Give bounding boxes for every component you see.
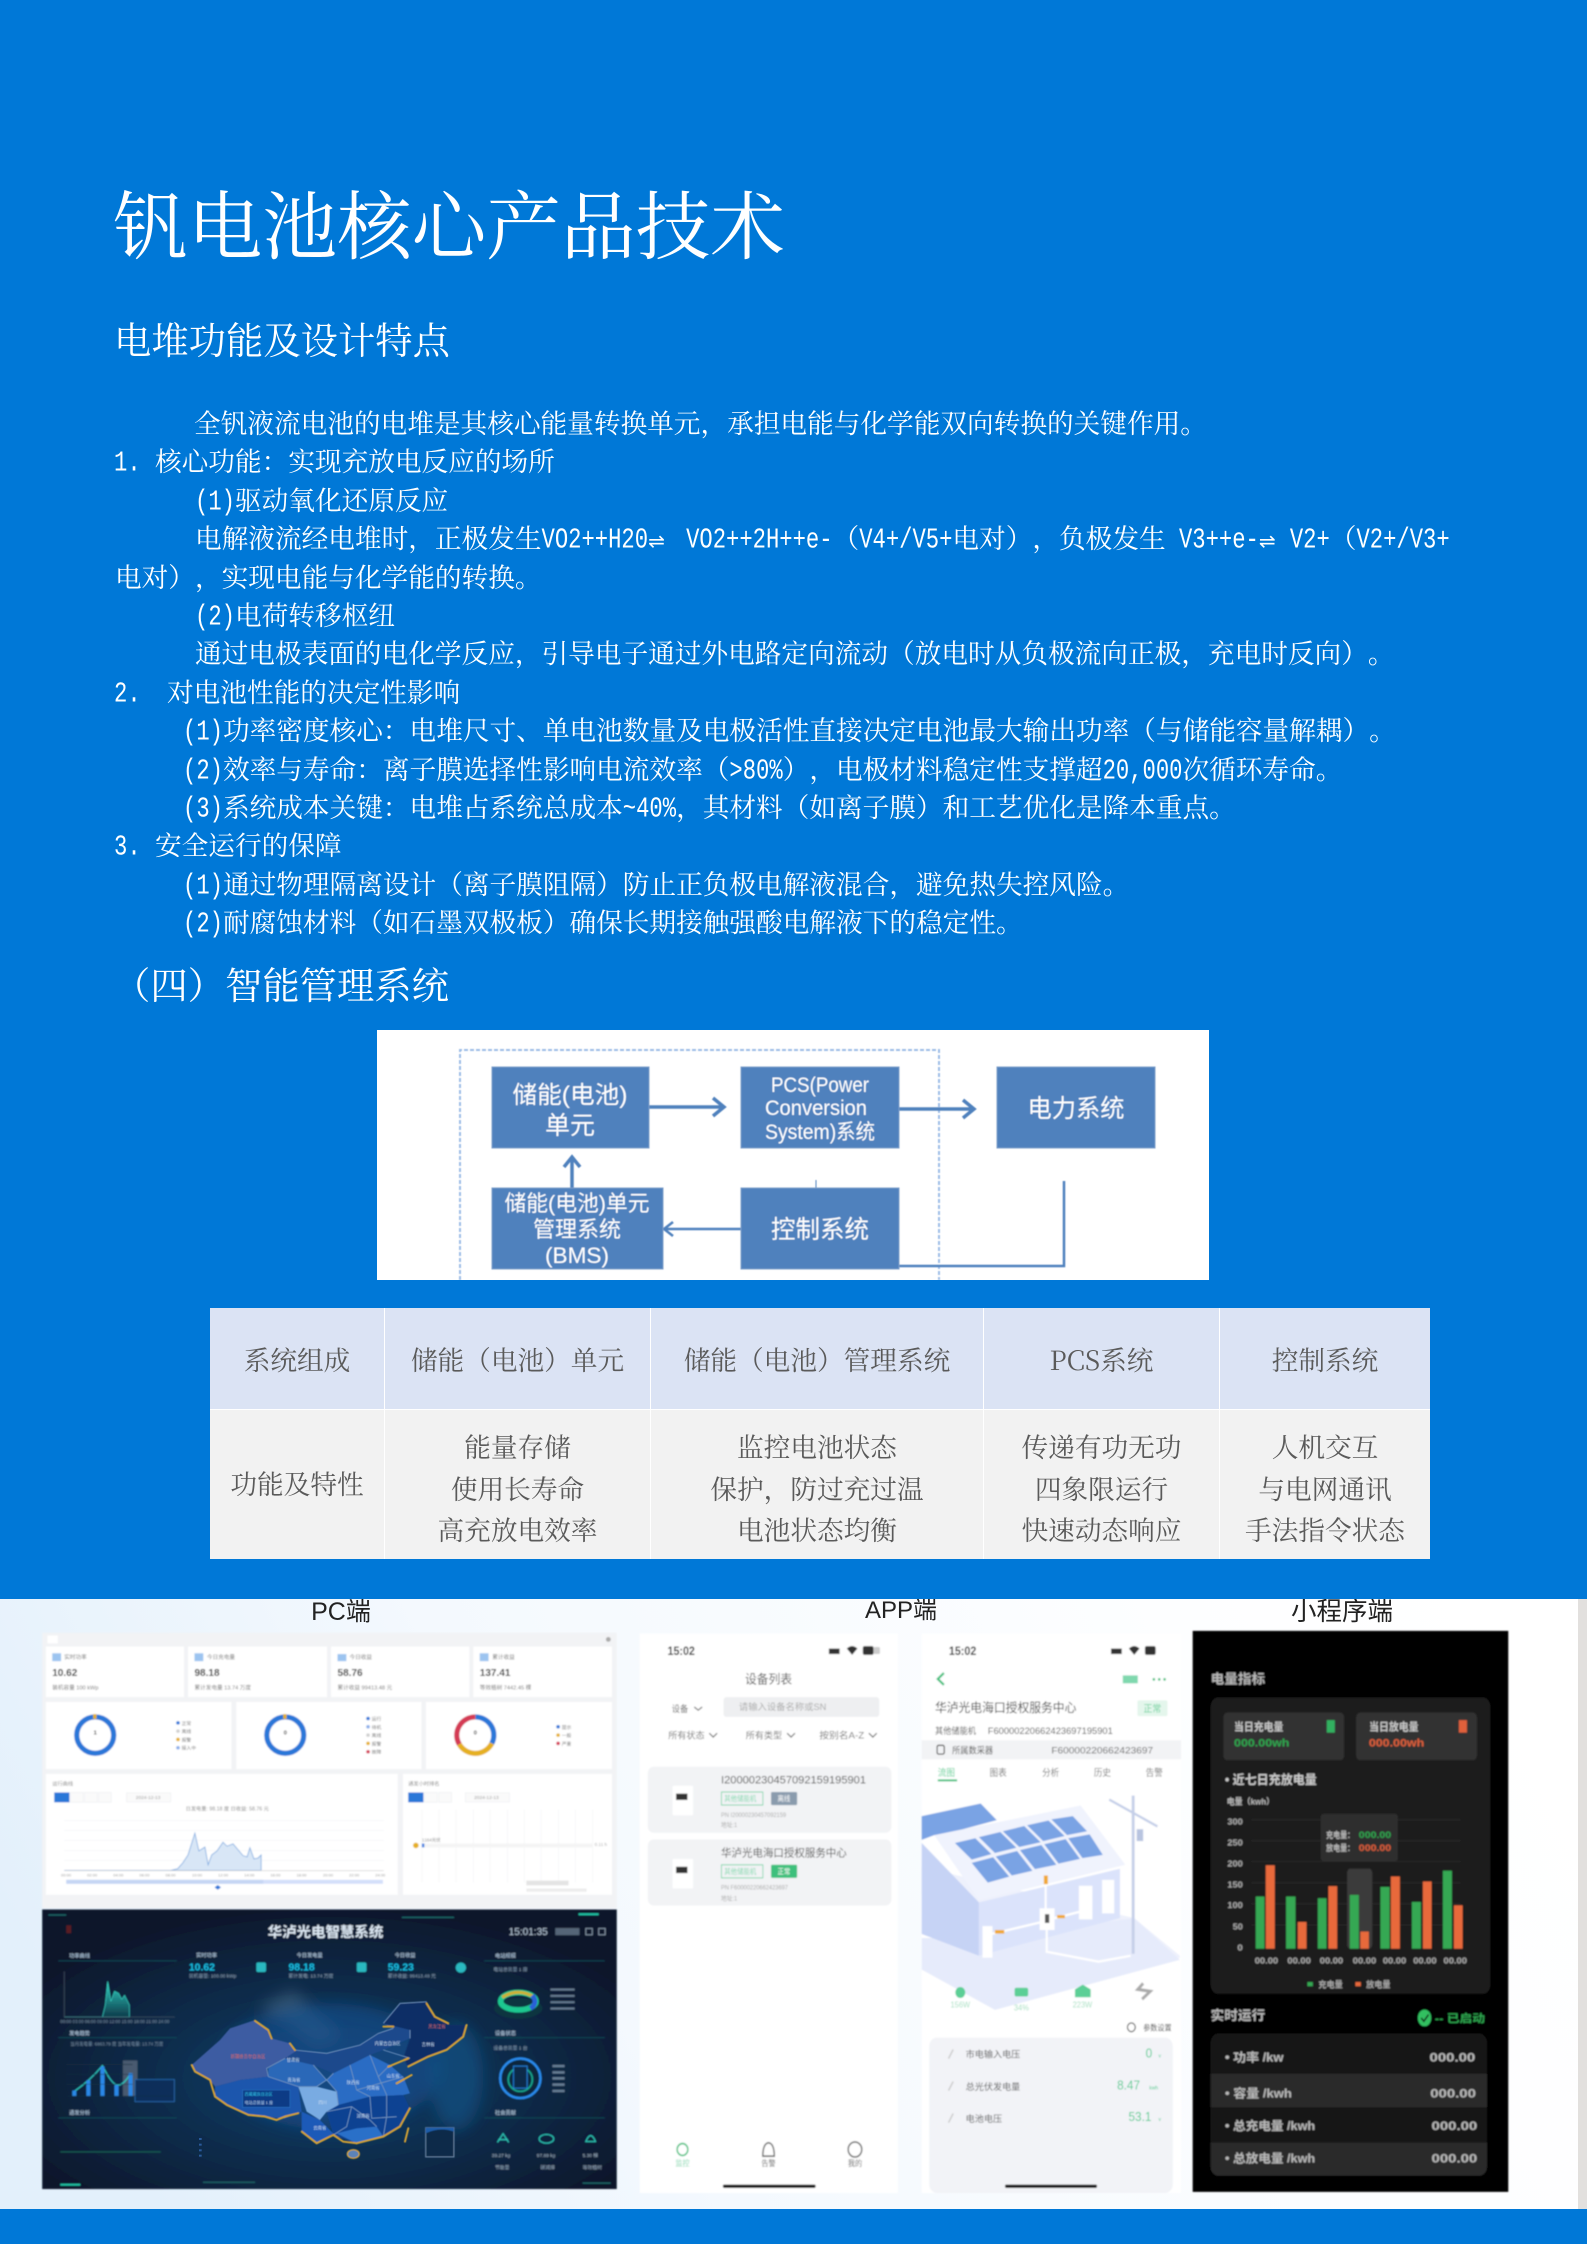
screenshot: big-screen map dashboard: 59.23 — [388, 1962, 414, 1973]
text block: stack function description: 2. — [114, 678, 141, 710]
screenshot: PC dashboard: 等效植树 7442.45 棵 — [480, 1684, 532, 1692]
screenshot: APP device list: 我的 — [848, 2158, 862, 2168]
screenshot: mini program: 实时运行 — [1211, 2007, 1265, 2023]
text block: stack function description: 20,000 — [1103, 755, 1182, 787]
screenshot: APP device detail: 正常 — [1144, 1702, 1161, 1714]
table: system composition: 监控电池状态 — [737, 1426, 897, 1465]
map of China: 青海省 — [287, 2076, 301, 2083]
screenshot: APP device detail: F60000220662423697195901 — [988, 1726, 1113, 1736]
diagram: storage system block flow: 电力系统 — [1028, 1095, 1124, 1123]
screenshot: APP device detail: 流图 — [938, 1767, 955, 1778]
screenshot: big-screen map dashboard: 功率曲线 — [69, 1952, 91, 1960]
screenshot: PC dashboard: 接入中 — [182, 1745, 196, 1752]
screenshot: mini program: • 功率 /kw — [1225, 2049, 1284, 2065]
text block: stack function description: (2) — [183, 909, 223, 941]
screenshot: APP device list: 告警 — [761, 2158, 776, 2168]
screenshot: APP device detail: 告警 — [1146, 1767, 1163, 1778]
screenshot: mini program: 100 — [1227, 1901, 1243, 1910]
screenshot: mini program: 00.00 — [1353, 1956, 1376, 1966]
text block: stack function description: (2) — [183, 755, 223, 787]
screenshot: APP device list: 请输入设备名称或SN — [739, 1701, 826, 1712]
screenshot: big-screen map dashboard: 碳减排 — [540, 2164, 555, 2171]
screenshot: mini program: • 容量 /kwh — [1225, 2085, 1292, 2101]
table: system composition — [210, 1308, 1430, 1559]
map of China: 湖南省 — [357, 2112, 370, 2119]
heading: stack features: 电堆功能及设计特点 — [114, 311, 450, 365]
screenshot: PC dashboard: 运行曲线 — [52, 1780, 73, 1788]
screenshot: mini program: 电量（kwh） — [1227, 1796, 1274, 1807]
screenshot: APP device list: 华泸光电海口授权服务中心 — [721, 1846, 847, 1860]
screenshot: PC dashboard: 严重 — [562, 1740, 572, 1747]
screenshot: mini program: • 近七日充放电量 — [1225, 1772, 1317, 1787]
screenshot: APP device detail: 0 — [1146, 2046, 1152, 2061]
text block: stack function description: 驱动氧化还原反应 — [235, 479, 448, 518]
screenshot: PC dashboard: 18:00 — [297, 1872, 307, 1877]
screenshot: mini program: 000.00wh — [1369, 1738, 1424, 1750]
diagram: storage system block flow — [377, 1030, 1209, 1280]
text block: stack function description — [114, 402, 1450, 941]
screenshot: APP device detail: 15:02 — [949, 1645, 976, 1658]
screenshot: APP device detail: 8.47 — [1117, 2078, 1140, 2093]
screenshot: PC dashboard: 离线 — [372, 1732, 382, 1739]
panel: platform screenshots — [0, 1599, 1587, 2209]
screenshot: PC dashboard: 04:00 — [113, 1872, 124, 1877]
table: system composition: PCS系统 — [1050, 1339, 1153, 1378]
map of China: 河南省 — [367, 2084, 380, 2091]
diagram: storage system block flow: (BMS) — [545, 1243, 609, 1268]
diagram: storage system block flow: 控制系统 — [771, 1216, 869, 1244]
screenshot: big-screen map dashboard: 97.89 kg — [537, 2153, 556, 2159]
text block: stack function description: 功率密度核心：电堆尺寸、单电池数量及电极活性直接决定电池最大输出功率（与储能容量解耦）。 — [223, 709, 1396, 748]
diagram: storage system block flow: Conversion — [765, 1097, 867, 1120]
screenshot: big-screen map dashboard: 设备状态 — [495, 2029, 517, 2037]
map of China: 云南省 — [313, 2124, 327, 2131]
text block: stack function description: 效率与寿命：离子膜选择性影响电流效率（ ），电极材料稳定性支撑超 次循环寿命。 — [223, 748, 1342, 787]
screenshot: PC dashboard: 14:00 — [244, 1872, 255, 1877]
screenshot: APP device list: 其他储能机 — [724, 1794, 757, 1803]
diagram: storage system block flow: 管理系统 — [533, 1217, 621, 1242]
screenshot: PC dashboard: 137.41 — [480, 1668, 511, 1679]
table: system composition: 系统组成 — [244, 1339, 350, 1378]
screenshot: APP device detail: F60000220662423697 — [1051, 1745, 1153, 1755]
map of China — [192, 1990, 483, 2158]
screenshot: mini program: 000.00 — [1432, 2153, 1477, 2166]
map of China: 内蒙古自治区 — [375, 2040, 401, 2047]
screenshot: APP device detail: 223W — [1073, 2000, 1093, 2010]
text block: stack function description: VO2++2H++e- — [686, 525, 833, 557]
diagram: storage system block flow: PCS(Power — [771, 1074, 869, 1097]
map of China: 吉林省 — [422, 2041, 435, 2048]
screenshot: APP device detail: v — [1159, 2053, 1161, 2059]
title: 钒电池核心产品技术 — [113, 168, 785, 275]
table: system composition: 传递有功无功 — [1022, 1426, 1181, 1465]
text block: stack function description: V4+/V5+ — [859, 525, 952, 557]
text block: stack function description: >80% — [729, 755, 783, 787]
text block: stack function description: (1) — [183, 870, 223, 902]
screenshot: big-screen map dashboard: 华泸光电智慧系统 — [268, 1923, 383, 1941]
screenshot: APP device list: 地址:1 — [721, 1894, 738, 1902]
screenshot: big-screen map dashboard: 00:00 03:00 06:00 09:00 12:00 15:00 18:00 21:00 24:00 — [60, 2019, 170, 2024]
screenshot: big-screen map dashboard: 通发分析 — [69, 2109, 90, 2117]
screenshot: mini program: 00.00 — [1444, 1956, 1467, 1966]
map of China: 电站总装量 1 座 — [245, 2099, 273, 2105]
table: system composition: 保护，防过充过温 — [710, 1468, 924, 1507]
screenshot: big-screen map dashboard: 电站总装量 1 座 — [493, 1966, 528, 1973]
text block: stack function description: 1. — [114, 448, 141, 480]
text block: stack function description: V2+ — [1290, 525, 1330, 557]
screenshot: APP device list: 设备列表 — [745, 1672, 792, 1686]
screenshot: APP device detail: 156W — [951, 2000, 971, 2010]
screenshot: PC dashboard: 10.62 — [52, 1668, 78, 1679]
text block: stack function description: V3++e- — [1179, 525, 1259, 557]
screenshot: APP device detail: 历史 — [1094, 1767, 1111, 1778]
screenshot: big-screen map dashboard: 等效植树 — [583, 2164, 602, 2171]
screenshot: PC dashboard: 10:00 — [192, 1872, 203, 1877]
screenshot: APP device list: PN F60000220662423697 — [721, 1886, 789, 1892]
screenshot: big-screen map dashboard: 装机容量: 100.00 kWp — [189, 1973, 237, 1979]
screenshot: APP device list: 按别名A-Z — [819, 1729, 865, 1740]
table: system composition: 能量存储 — [464, 1426, 571, 1465]
screenshot: mini program: 200 — [1227, 1859, 1243, 1869]
text block: stack function description: ~40% — [623, 794, 676, 826]
screenshot: PC dashboard: 日发电量: 98.18 度 日收益: 58.76 元 — [186, 1805, 269, 1813]
screenshot: PC dashboard: 装机容量 100 kWp — [52, 1684, 98, 1692]
text block: stack function description: 电荷转移枢纽 — [235, 594, 395, 633]
screenshot: mini program: 充电量 — [1318, 1979, 1343, 1990]
screenshot: APP device detail: 市电输入电压 — [966, 2048, 1021, 2060]
screenshot: PC dashboard — [42, 1633, 617, 1908]
screenshot: PC dashboard: 运行 — [372, 1716, 382, 1722]
screenshot: mini program: 50 — [1233, 1922, 1243, 1932]
screenshot: APP device list: PN I20000230457092159 — [721, 1813, 787, 1819]
heading: smart management system: （四）智能管理系统 — [113, 956, 449, 1010]
screenshot: big-screen map dashboard: 15:01:35 — [509, 1927, 548, 1938]
screenshot: big-screen map dashboard: 实时功率 — [196, 1951, 217, 1959]
screenshot: APP device list — [640, 1633, 898, 2193]
diagram: storage system block flow: System)系统 — [765, 1121, 875, 1144]
screenshot: APP device list: 离线 — [777, 1794, 791, 1803]
screenshot: APP device list: 监控 — [675, 2158, 690, 2168]
table: system composition: 高充放电效率 — [438, 1509, 597, 1548]
screenshot: big-screen map dashboard: 今日收益 — [395, 1951, 415, 1959]
screenshot: APP device list: 其他储能机 — [724, 1867, 757, 1876]
screenshot: APP device detail: 34% — [1014, 2003, 1029, 2013]
screenshot: APP device detail: 电池电压 — [966, 2112, 1002, 2124]
screenshot: APP device list: 所有状态 — [668, 1729, 705, 1740]
screenshot: PC dashboard: 08:00 — [166, 1872, 176, 1877]
diagram: storage system block flow: 储能(电池)单元 — [504, 1191, 650, 1216]
screenshot: mini program — [1193, 1631, 1508, 2192]
map of China: 陕西省 — [347, 2079, 360, 2086]
table: system composition: 储能（电池）单元 — [411, 1339, 624, 1378]
text block: stack function description: ⇌ — [1259, 529, 1276, 553]
screenshot: APP device list: 正常 — [777, 1867, 791, 1876]
screenshot: PC dashboard: 提示 — [562, 1724, 572, 1731]
screenshot: big-screen map dashboard: 10.62 — [189, 1962, 215, 1973]
screenshot: PC dashboard: 通发小时排名 — [408, 1780, 440, 1788]
screenshot: mini program: 000.00wh — [1234, 1738, 1289, 1750]
screenshot: big-screen map dashboard: 39.27 kg — [492, 2153, 511, 2159]
map of China: 西藏藏族自治区 — [245, 2090, 273, 2096]
screenshot: PC dashboard: 今日充电量 — [207, 1653, 235, 1661]
screenshot: APP device list: 地址:1 — [721, 1821, 738, 1829]
text block: stack function description: V2+/V3+ — [1356, 525, 1450, 557]
screenshot: APP device detail: 所属数采器 — [952, 1744, 993, 1755]
screenshot: APP device detail: v — [1159, 2117, 1161, 2123]
screenshot: mini program: 放电量： — [1326, 1842, 1354, 1853]
screenshot: mini program: 00.00 — [1255, 1956, 1278, 1966]
screenshot: PC dashboard: 离线 — [182, 1728, 191, 1735]
screenshot: big-screen map dashboard — [42, 1909, 617, 2189]
table: system composition: 与电网通讯 — [1258, 1468, 1392, 1507]
screenshot: APP device detail: 53.1 — [1129, 2109, 1152, 2124]
screenshot: APP device detail: 华泸光电海口授权服务中心 — [935, 1701, 1077, 1715]
text block: stack function description: (1) — [183, 717, 223, 749]
screenshot: APP device list: I20000230457092159195901 — [721, 1774, 866, 1787]
screenshot: PC dashboard: 累计发电量 13.74 万度 — [194, 1684, 251, 1692]
screenshot: mini program: 000.00 — [1432, 2120, 1477, 2133]
screenshot: PC dashboard: 一般 — [562, 1732, 572, 1739]
text block: stack function description: 核心功能：实现充放电反应的场所 — [155, 440, 555, 479]
screenshot: PC dashboard: 2024-12-13 — [474, 1795, 499, 1801]
text block: stack function description: (2) — [195, 602, 235, 634]
screenshot: big-screen map dashboard: 社会贡献 — [495, 2109, 517, 2117]
illustration: solar house — [922, 1796, 1180, 2010]
text block: stack function description: 系统成本关键：电堆占系统总成本 ，其材料（如离子膜）和工艺优化是降本重点。 — [223, 786, 1236, 825]
screenshot: mini program: 电量指标 — [1211, 1670, 1265, 1687]
diagram: storage system block flow: 储能(电池) — [512, 1082, 628, 1109]
text block: stack function description: 电解液流经电堆时，正极发生 （ 电对），负极发生 （ — [195, 517, 1356, 556]
screenshot: PC dashboard: 98.18 — [194, 1668, 220, 1679]
screenshot: PC dashboard: 0 — [284, 1731, 288, 1737]
screenshot: APP device detail — [922, 1633, 1181, 2193]
screenshot: APP device detail: 图表 — [990, 1767, 1007, 1778]
screenshot: big-screen map dashboard: 电站规模 — [495, 1952, 517, 1960]
screenshot: mini program: 00.00 — [1413, 1956, 1437, 1966]
screenshot: PC dashboard: 实时功率 — [64, 1653, 87, 1661]
screenshot: mini program: 000.00 — [1430, 2051, 1475, 2065]
screenshot: mini program: 000.00 — [1430, 2088, 1476, 2101]
table: system composition: 快速动态响应 — [1022, 1509, 1181, 1548]
table: system composition: 使用长寿命 — [451, 1468, 584, 1507]
screenshot: mini program: 000.00 — [1359, 1843, 1392, 1853]
map of China: 新疆维吾尔自治区 — [231, 2053, 266, 2060]
text block: stack function description: 对电池性能的决定性影响 — [167, 671, 460, 710]
screenshot: PC dashboard: 0 — [474, 1731, 478, 1737]
screenshot: PC dashboard: 正常 — [182, 1720, 191, 1727]
text block: stack function description: 3. — [114, 832, 141, 864]
screenshot: APP device detail: 其他储能机 — [935, 1724, 976, 1736]
screenshot: mini program: 当日充电量 — [1234, 1720, 1284, 1734]
map of China: 黑龙江省 — [428, 2023, 446, 2030]
screenshot: big-screen map dashboard: 设备总装量 1 台 — [493, 2044, 528, 2051]
screenshot: APP device list: 15:02 — [667, 1645, 695, 1658]
screenshot: mini program: • 总充电量 /kwh — [1225, 2118, 1315, 2133]
screenshot: mini program: 300 — [1227, 1817, 1243, 1827]
screenshot: mini program: • 总放电量 /kwh — [1225, 2151, 1315, 2166]
screenshot: APP device detail: 分析 — [1042, 1767, 1059, 1778]
screenshot: mini program: 000.00 — [1359, 1830, 1392, 1840]
screenshot: APP device detail: 参数设置 — [1143, 2022, 1172, 2033]
screenshot: PC dashboard: 今日收益 — [350, 1653, 372, 1661]
screenshot: PC dashboard: 22:00 — [349, 1872, 360, 1877]
table: system composition: 人机交互 — [1272, 1426, 1378, 1465]
text block: stack function description: 通过电极表面的电化学反应，引导电子通过外电路定向流动（放电时从负极流向正极，充电时反向）。 — [195, 632, 1395, 671]
screenshot: PC dashboard: 58.76 — [338, 1668, 363, 1679]
screenshot: mini program: -- 已启动 — [1435, 2011, 1485, 2025]
screenshot: mini program: 0 — [1237, 1943, 1243, 1953]
screenshot: APP device detail: kwh — [1149, 2085, 1158, 2091]
screenshot: PC dashboard: 1164光伏 — [422, 1837, 441, 1843]
text block: stack function description: 耐腐蚀材料（如石墨双极板）确保长期接触强酸电解液下的稳定性。 — [223, 901, 1023, 940]
map of China: 甘肃省 — [287, 2056, 300, 2063]
screenshot: PC dashboard: 报警 — [372, 1740, 382, 1747]
table: system composition: 储能（电池）管理系统 — [684, 1339, 950, 1378]
screenshot: PC dashboard: 24:00 — [375, 1872, 386, 1877]
text block: stack function description: (1) — [195, 486, 235, 518]
text block: stack function description: (3) — [183, 794, 223, 826]
screenshot: PC dashboard: 0.11 h — [595, 1842, 607, 1847]
screenshot: PC dashboard: 故障 — [372, 1749, 382, 1756]
table: system composition: 功能及特性 — [230, 1463, 364, 1502]
text block: stack function description: 全钒液流电池的电堆是其核心能量转换单元，承担电能与化学能双向转换的关键作用。 — [194, 402, 1207, 441]
screenshot: big-screen map dashboard: 98.18 — [288, 1962, 315, 1973]
screenshot: PC dashboard: 00:00 — [61, 1872, 72, 1877]
text block: stack function description: 通过物理隔离设计（离子膜阻隔）防止正负极电解液混合，避免热失控风险。 — [223, 863, 1129, 902]
text block: stack function description: 电对），实现电能与化学能的转换。 — [115, 556, 542, 595]
screenshot: PC dashboard: 2024-12-13 — [136, 1795, 161, 1801]
screenshot: mini program: 充电量： — [1326, 1829, 1354, 1840]
screenshot: big-screen map dashboard: 发电趋势 — [69, 2029, 91, 2037]
text block: stack function description: ⇌ — [648, 529, 665, 553]
table: system composition: 电池状态均衡 — [737, 1509, 897, 1548]
screenshot: APP device list: 设备 — [672, 1702, 689, 1714]
screenshot: mini program: 00.00 — [1383, 1956, 1406, 1966]
screenshot: mini program: 00.00 — [1320, 1956, 1343, 1966]
screenshot: big-screen map dashboard: 累计收益: 99413.48 元 — [388, 1973, 436, 1979]
table: system composition: 控制系统 — [1272, 1339, 1378, 1378]
screenshot: big-screen map dashboard: 5.30 棵 — [583, 2152, 598, 2159]
table: system composition: 手法指令状态 — [1245, 1509, 1405, 1548]
screenshot: PC dashboard: 1 — [94, 1731, 98, 1737]
screenshot: PC dashboard: 06:00 — [139, 1872, 150, 1877]
diagram: storage system block flow: 单元 — [545, 1112, 595, 1140]
screenshot: big-screen map dashboard: 节能量 — [495, 2164, 510, 2171]
screenshot: APP device detail: 总光伏发电量 — [966, 2080, 1021, 2092]
screenshot: PC dashboard: 累计收益 99413.48 元 — [338, 1684, 393, 1692]
screenshot: mini program: 放电量 — [1366, 1979, 1391, 1990]
screenshot: mini program: 当日放电量 — [1369, 1720, 1419, 1734]
screenshot: PC dashboard: 12:00 — [218, 1872, 229, 1877]
table: system composition: 四象限运行 — [1035, 1468, 1168, 1507]
screenshot: PC dashboard: 02:00 — [87, 1872, 98, 1877]
screenshot: mini program: 250 — [1227, 1838, 1243, 1847]
screenshot: big-screen map dashboard: 今日发电量 — [297, 1951, 323, 1959]
map of China: 山东省 — [387, 2072, 400, 2079]
screenshot: PC dashboard: 累计收益 — [492, 1653, 515, 1661]
screenshot: PC dashboard: 待机 — [372, 1724, 382, 1731]
right widgets — [494, 1998, 542, 2019]
screenshot: PC dashboard: 报警 — [182, 1736, 191, 1743]
screenshot: PC dashboard: 20:00 — [323, 1872, 334, 1877]
map of China: 四川 — [318, 2100, 327, 2105]
screenshot: big-screen map dashboard: 当月发电量: 6863.79 度 当年发电量: 13.74 万度 — [70, 2041, 164, 2047]
screenshot: PC dashboard: 16:00 — [270, 1872, 281, 1877]
screenshot: mini program: 150 — [1227, 1880, 1243, 1890]
screenshot: mini program: 00.00 — [1287, 1956, 1311, 1966]
text block: stack function description: VO2++H20 — [542, 525, 648, 557]
screenshot: big-screen map dashboard: 累计发电: 13.74 万度 — [288, 1973, 334, 1979]
screenshot: APP device list: 所有类型 — [746, 1729, 782, 1740]
text block: stack function description: 安全运行的保障 — [155, 824, 342, 863]
